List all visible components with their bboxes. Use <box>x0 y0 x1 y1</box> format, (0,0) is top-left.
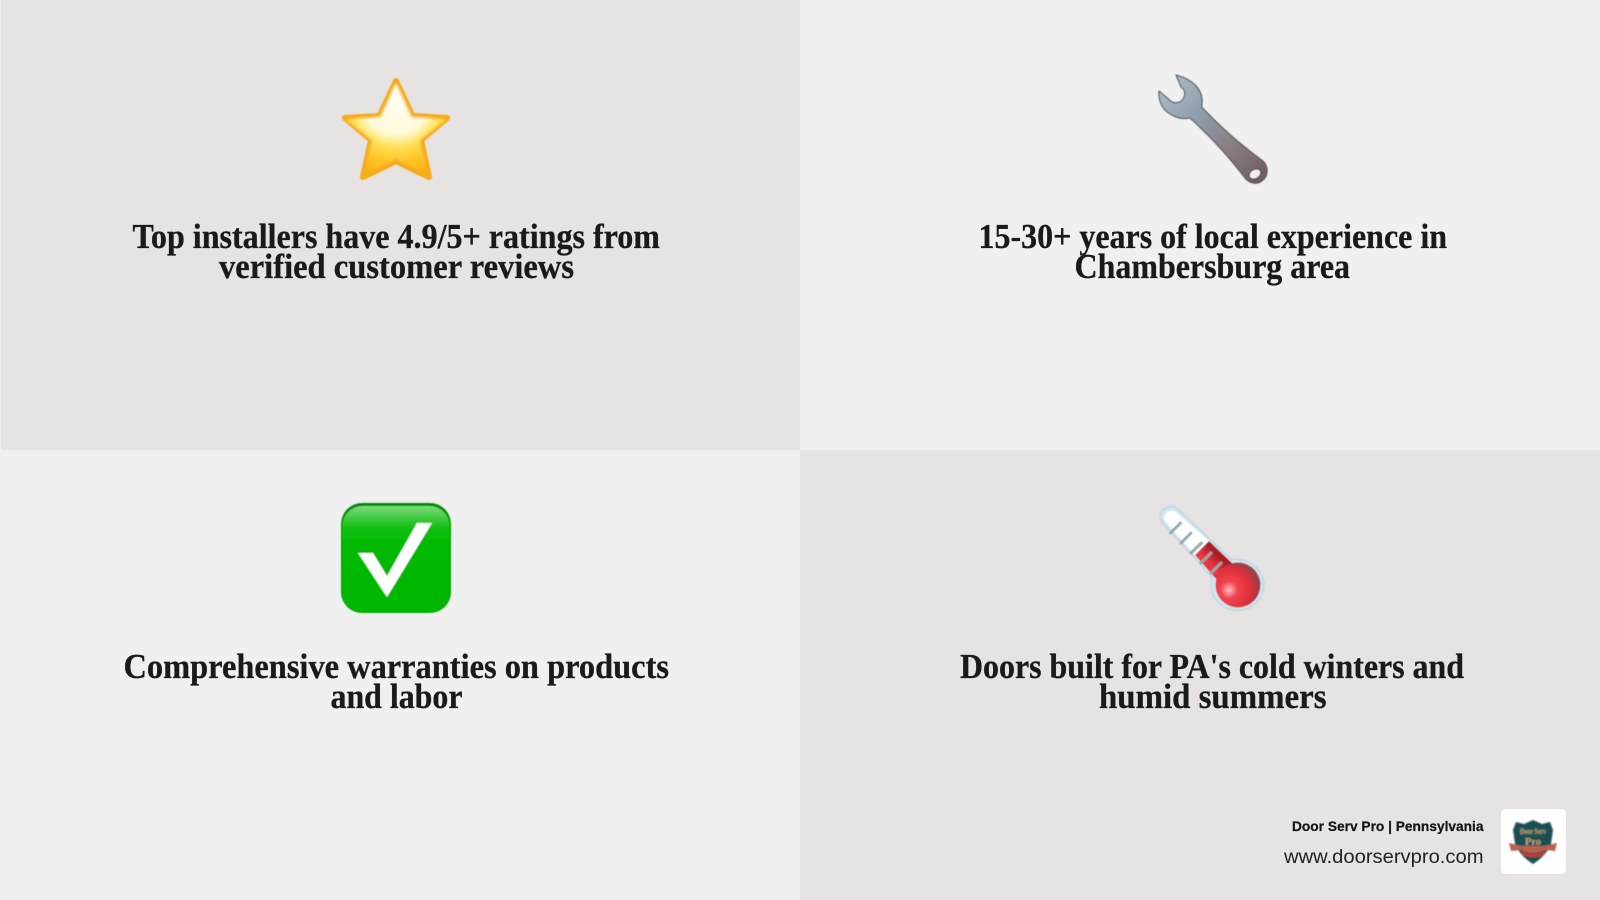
heading: ratings: Top installers have 4.9/5+ ratings from <box>132 217 660 256</box>
heading: climate: humid summers <box>1099 677 1326 716</box>
panel: ratings <box>1 0 800 450</box>
heading: experience: Chambersburg area <box>1074 247 1350 286</box>
heading: climate <box>960 647 1464 716</box>
heading: ratings <box>132 217 660 286</box>
icon: wrench <box>1159 75 1267 183</box>
brand name: Door Serv Pro | Pennsylvania <box>1292 818 1484 834</box>
footer: brand <box>1283 809 1566 874</box>
heading: ratings: verified customer reviews <box>219 247 574 286</box>
website: www.doorservpro.com <box>1283 846 1484 868</box>
heading: climate: Doors built for PA's cold winters and <box>960 647 1464 686</box>
logo: Door Serv <box>1520 827 1546 836</box>
logo <box>1501 809 1566 874</box>
logo: Pro <box>1525 836 1541 848</box>
panel: experience <box>800 0 1600 450</box>
panel: climate <box>800 450 1600 900</box>
heading: experience: 15-30+ years of local experience in <box>978 217 1447 256</box>
heading: warranties: and labor <box>330 677 462 716</box>
panel: warranties <box>1 450 800 900</box>
heading: warranties: Comprehensive warranties on products <box>124 647 669 686</box>
heading: warranties <box>124 647 669 716</box>
heading: experience <box>978 217 1447 286</box>
icon: check mark <box>341 503 451 613</box>
icon: star <box>345 81 447 177</box>
icon: thermometer <box>1160 506 1264 610</box>
